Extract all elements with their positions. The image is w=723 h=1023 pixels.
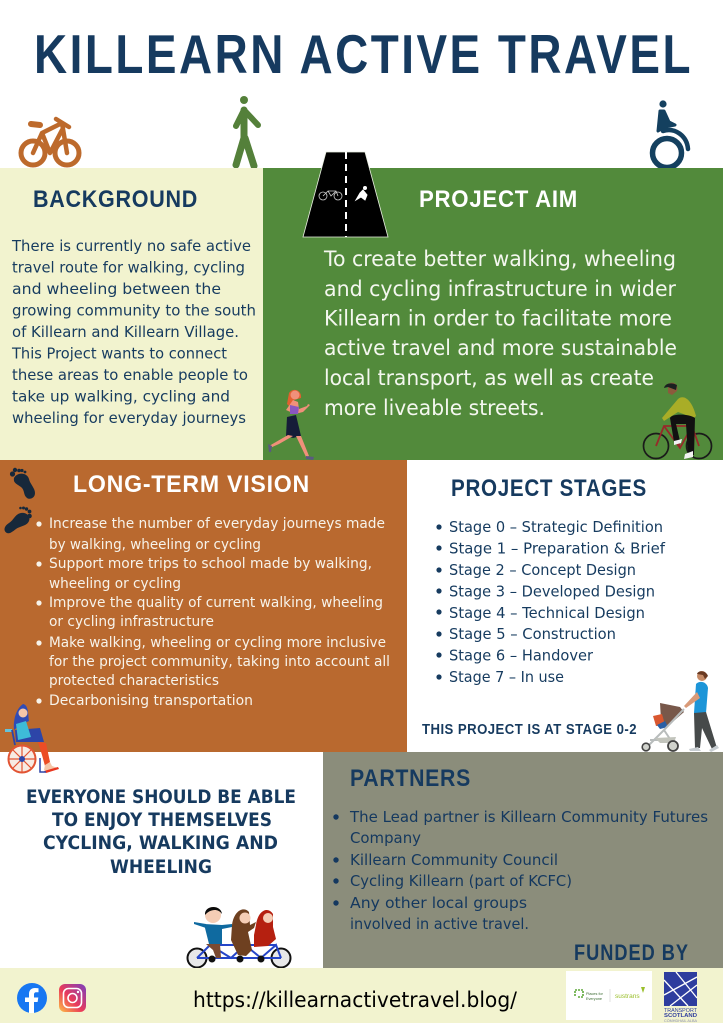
heading: long-term vision: LONG-TERM VISION — [73, 471, 310, 498]
icon: walking person — [236, 96, 258, 166]
text block: stages list: Stage 5 – Construction — [449, 625, 616, 643]
text block: stages list: Stage 0 – Strategic Definition — [449, 518, 663, 536]
text block: vision bullets: Decarbonising transportation — [49, 693, 253, 709]
text block: vision bullets: Support more trips to school made by walking, — [49, 556, 372, 572]
logo: transport scotland: CÒMHDHAIL ALBA — [664, 1018, 698, 1023]
logo: places for everyone and sustrans: sustrans — [615, 993, 640, 1000]
text block: stages list: Stage 7 – In use — [449, 668, 564, 686]
text block: partners list: Company — [350, 829, 421, 847]
icon: runner — [268, 390, 314, 460]
heading: background: BACKGROUND — [33, 186, 198, 213]
text block: project aim: active travel and more sustainable — [324, 336, 677, 360]
icon: facebook — [17, 983, 47, 1013]
icon: wheelchair user — [652, 100, 688, 168]
text block: vision bullets: by walking, wheeling or cycling — [49, 537, 261, 553]
text block: stages list: Stage 3 – Developed Design — [449, 582, 655, 600]
icon: road — [303, 152, 388, 237]
text block: background: growing community to the south — [12, 302, 256, 320]
text block: project aim: Killearn in order to facilitate more — [324, 306, 672, 330]
icon: instagram — [59, 984, 86, 1012]
text block: stages list — [436, 518, 666, 686]
icon: bicycle — [21, 119, 79, 165]
text block: vision bullets: Increase the number of everyday journeys made — [49, 516, 385, 532]
text block: background: these areas to enable people to — [12, 366, 248, 384]
text block: partners list: Any other local groups — [350, 894, 527, 912]
callout: current stage: THIS PROJECT IS AT STAGE 0-2 — [422, 722, 637, 738]
icon: man with stroller — [642, 671, 719, 752]
text block: partners list: Killearn Community Council — [350, 851, 558, 869]
logo: transport scotland — [664, 972, 698, 1023]
text block: vision bullets: or cycling infrastructure — [49, 614, 214, 630]
text block: partners list — [333, 808, 708, 933]
text block: background — [11, 237, 256, 427]
text block: partners list: Cycling Killearn (part of KCFC) — [350, 872, 572, 890]
logo: transport scotland: SCOTLAND — [664, 1013, 697, 1019]
icon: footprints — [5, 468, 35, 533]
panel: project aim — [263, 168, 723, 460]
text block: stages list: Stage 6 – Handover — [449, 646, 594, 664]
logo: places for everyone and sustrans: Everyone — [586, 997, 602, 1001]
text block: vision bullets: for the project community, taking into account all — [49, 654, 390, 670]
text block: everyone should: WHEELING — [110, 857, 212, 878]
text block: background: travel route for walking, cycling — [12, 258, 245, 276]
text block: project aim — [323, 247, 677, 420]
text block: stages list: Stage 4 – Technical Design — [449, 604, 645, 622]
text block: background: and wheeling between the — [12, 280, 221, 298]
website url: https://killearnactivetravel.blog/ — [193, 988, 518, 1012]
text block: project aim: local transport, as well as create — [324, 366, 654, 390]
text block: vision bullets: wheeling or cycling — [49, 576, 181, 592]
text block: partners list: The Lead partner is Killearn Community Futures — [349, 808, 708, 826]
text block: background: of Killearn and Killearn Village. — [12, 323, 239, 341]
icon: cyclist — [644, 383, 712, 459]
text block: background: take up walking, cycling and — [12, 388, 230, 406]
text block: vision bullets: Make walking, wheeling or cycling more inclusive — [49, 635, 386, 651]
text block: everyone should: CYCLING, WALKING AND — [43, 833, 278, 854]
heading: project stages: PROJECT STAGES — [451, 475, 647, 502]
text block: stages list: Stage 2 – Concept Design — [449, 561, 636, 579]
panel: project stages — [407, 460, 723, 752]
text block: project aim: To create better walking, wheeling — [323, 247, 676, 271]
heading: funded by: FUNDED BY — [574, 940, 689, 965]
heading: partners: PARTNERS — [350, 765, 471, 792]
logo: places for everyone and sustrans: Places for — [586, 992, 604, 996]
text block: background: This Project wants to connect — [11, 344, 227, 362]
text block: background: There is currently no safe active — [11, 237, 251, 255]
text block: vision bullets — [36, 516, 390, 709]
text block: everyone should: EVERYONE SHOULD BE ABLE — [26, 787, 296, 808]
text block: stages list: Stage 1 – Preparation & Brief — [449, 540, 666, 558]
text block: project aim: more liveable streets. — [324, 396, 545, 420]
logo: places for everyone and sustrans — [566, 971, 652, 1020]
text block: project aim: and cycling infrastructure in wider — [324, 277, 676, 301]
text block: background: wheeling for everyday journeys — [12, 409, 246, 427]
text block: vision bullets: Improve the quality of current walking, wheeling — [49, 595, 383, 611]
panel: background — [0, 168, 263, 463]
text block: vision bullets: protected characteristics — [49, 673, 219, 689]
panel: partners — [323, 752, 723, 968]
logo: transport scotland: TRANSPORT — [664, 1008, 697, 1014]
panel: long-term vision — [0, 460, 407, 752]
text block: everyone should: TO ENJOY THEMSELVES — [52, 810, 272, 831]
panel: footer — [0, 968, 723, 1023]
heading: project aim: PROJECT AIM — [419, 186, 578, 213]
text block: partners list: involved in active travel. — [350, 915, 529, 933]
icon: tandem bicycle with children — [188, 907, 290, 968]
text block: everyone should — [26, 787, 296, 878]
icon: woman in wheelchair — [5, 704, 59, 773]
